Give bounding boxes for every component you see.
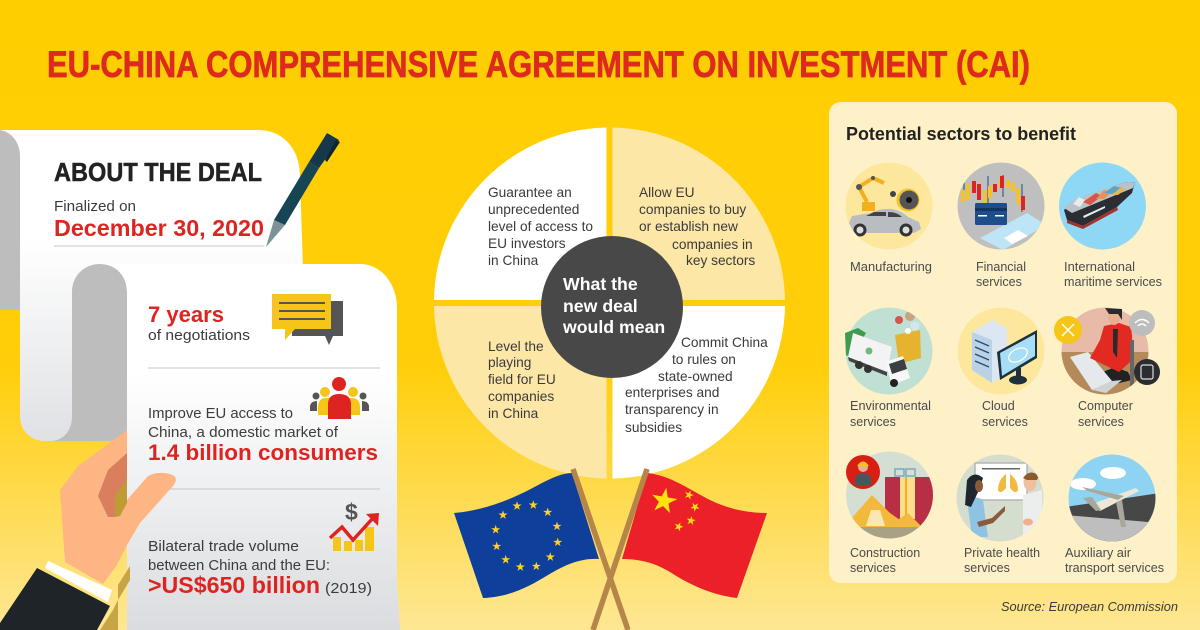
text: bilateral trade volume: between China and the EU: [148,558,330,574]
sector: financial services: services [976,275,1022,289]
quadrant: level playing field: playing [488,355,531,370]
quadrant: access: unprecedented [488,202,579,217]
quadrant: companies: or establish new [639,219,738,234]
sector: auxiliary air transport services [1065,454,1164,575]
sector: environmental services [845,308,932,429]
sector: private health services: services [964,561,1010,575]
quadrant: level playing field: in China [488,406,539,421]
quadrant: level playing field: field for EU [488,372,556,387]
sector: computer services: Computer [1078,399,1133,413]
quadrant: companies: key sectors [686,253,755,268]
scroll sheet back [0,130,303,441]
icon: rising chart: $ [345,499,358,525]
heading: about the deal: ABOUT THE DEAL [54,157,262,187]
scroll roll front [50,264,127,441]
quadrant: companies: companies to buy [639,202,746,217]
text: improve EU access [148,406,339,441]
text: date: December 30, 2020 [54,215,264,241]
icon: China flag [622,473,767,598]
centre circle: What the [563,274,638,294]
sector: manufacturing: Manufacturing [850,260,932,274]
centre circle [541,236,683,378]
text: finalized on: Finalized on [54,199,136,215]
text: of negotiations: of negotiations [148,328,250,344]
sector: manufacturing [846,162,932,274]
scroll sheet front [100,264,400,630]
quadrant: rules [612,306,785,478]
scroll roll back [0,130,20,310]
icon: speech bubbles [272,294,343,345]
sector: cloud services: services [982,415,1028,429]
quadrant: access [434,128,606,300]
quadrant: rules: subsidies [625,420,682,435]
icon: rising chart [330,499,379,551]
sector: financial services [958,162,1046,289]
quadrant: companies: Allow EU [639,185,695,200]
sector: construction services: Construction [850,546,920,560]
quadrant: rules: enterprises and [625,385,719,400]
quadrant: companies [612,128,785,300]
panel: potential sectors to benefit [829,102,1177,583]
quadrant: access: Guarantee an [488,185,572,200]
quadrant: access: level of access to [488,219,593,234]
panel: about the deal scroll [0,130,400,630]
quadrant: level playing field [434,306,606,478]
text: 7 years: 7 years [148,302,224,327]
source note: Source: European Commission [1001,599,1178,614]
text: 2019: (2019) [325,581,372,597]
sector: international maritime services: International [1064,260,1135,274]
sector: environmental services: services [850,415,896,429]
flag poles [573,469,647,630]
icon: people [310,377,369,419]
quadrant: rules: state-owned [658,369,733,384]
sector: financial services: Financial [976,260,1026,274]
text: bilateral trade volume: Bilateral trade volume [148,539,299,555]
text: trade value: >US$650 billion [148,572,320,598]
sector: private health services [956,454,1044,575]
sector: construction services [846,452,934,575]
quadrant: access: in China [488,253,539,268]
icon: crossed flags [454,469,767,630]
sector: cloud services [958,308,1044,429]
quadrant: level playing field: Level the [488,339,544,354]
sector: international maritime services [1059,162,1162,289]
centre circle: would mean [562,317,665,337]
sector: auxiliary air transport services: transport services [1065,561,1164,575]
quadrant: rules: transparency in [625,402,719,417]
sector: international maritime services: maritime services [1064,275,1162,289]
sector: private health services: Private health [964,546,1040,560]
sector: construction services: services [850,561,896,575]
text: 1.4 billion consumers: 1.4 billion consumers [148,440,378,465]
sector: cloud services: Cloud [982,399,1015,413]
quadrant: access: EU investors [488,236,566,251]
quadrant: rules: Commit China [681,335,768,350]
quadrant: companies: companies in [672,237,753,252]
sector: computer services: services [1078,415,1124,429]
centre circle: new deal [563,296,638,316]
icon: EU flag [454,473,599,598]
text: improve EU access: China, a domestic market of [148,425,339,441]
sector: auxiliary air transport services: Auxiliary air [1065,546,1131,560]
chart: what the new deal would mean [434,128,785,478]
title: EU-CHINA COMPREHENSIVE AGREEMENT ON INVESTMENT (CAI) [47,44,1030,85]
quadrant: rules: to rules on [672,352,736,367]
heading: potential sectors: Potential sectors to benefit [846,124,1076,144]
quadrant: level playing field: companies [488,389,554,404]
sector: environmental services: Environmental [850,399,931,413]
icon: pen [266,133,340,247]
sector: computer services [1054,308,1160,429]
text: improve EU access: Improve EU access to [148,406,293,422]
icon: hand holding scroll [0,430,176,630]
text: bilateral trade volume [148,539,330,574]
